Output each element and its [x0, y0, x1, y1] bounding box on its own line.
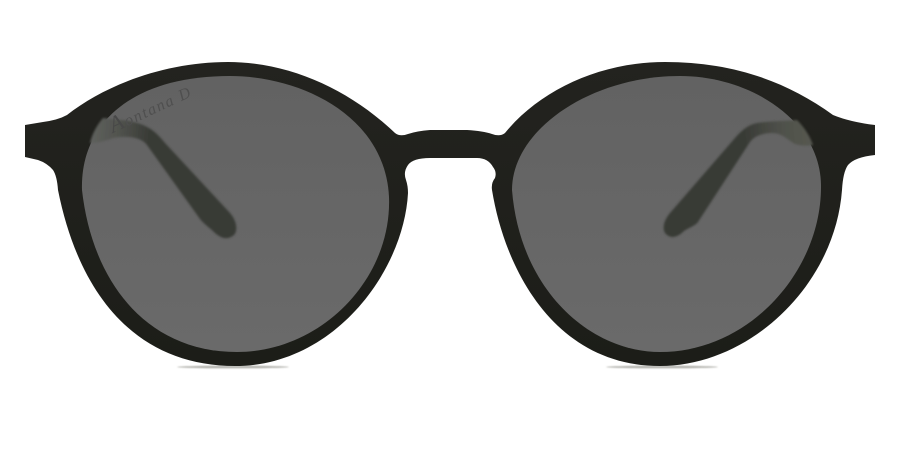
shadow: under left rim — [177, 366, 289, 368]
temple arm: left, seen through lens — [90, 118, 236, 238]
frame: front with bridge and hinges — [25, 62, 875, 366]
lens: right — [512, 76, 821, 352]
shadow: under right rim — [606, 366, 718, 368]
temple arm: right, seen through lens — [664, 120, 813, 237]
brand signature on left lens: Aontana D — [103, 77, 195, 138]
lens: left — [82, 76, 389, 352]
